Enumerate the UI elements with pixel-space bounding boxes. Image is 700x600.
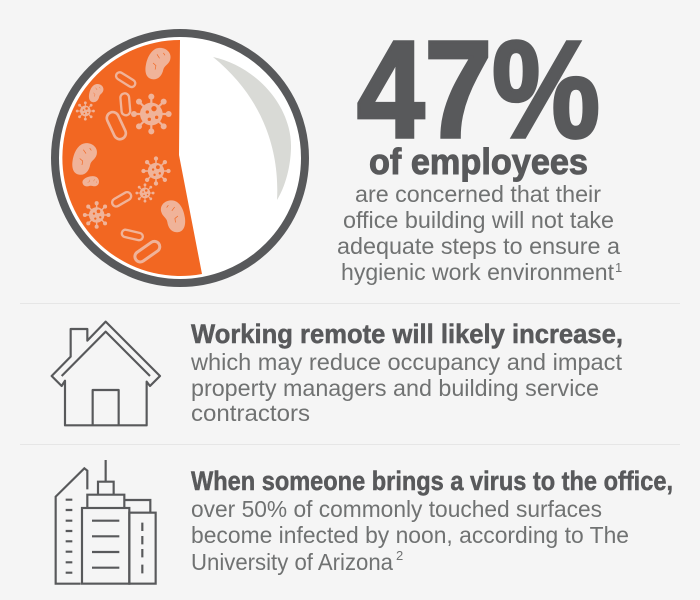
description text: hygienic work environment — [341, 259, 615, 285]
text block: working remote: which may reduce occupancy and impact — [190, 349, 623, 375]
description text — [337, 181, 622, 285]
big statistic: 47%: 47% — [357, 13, 600, 167]
description text: adequate steps to ensure a — [337, 233, 620, 259]
subheading: of employees: of employees — [369, 141, 588, 182]
text block: working remote: Working remote will likely increase, — [191, 319, 623, 349]
text block: virus in the office: University of Arizona — [191, 549, 393, 575]
text block: virus in the office: 2 — [396, 548, 403, 563]
grey crescent highlight — [213, 57, 291, 200]
text block: virus in the office — [191, 466, 673, 575]
icon: office buildings — [56, 460, 156, 584]
text block: working remote: property managers and building service — [191, 375, 599, 401]
text block: working remote: contractors — [191, 400, 310, 426]
text block: working remote — [190, 319, 623, 426]
description text: office building will not take — [343, 207, 614, 233]
text block: virus in the office: over 50% of commonly touched surfaces — [191, 496, 602, 522]
germs illustration — [70, 45, 187, 264]
description text: 1 — [615, 260, 622, 275]
orange 47% slice — [62, 40, 202, 276]
pie chart: 47% contaminated circle — [55, 33, 305, 283]
text block: virus in the office: become infected by noon, according to The — [191, 522, 629, 548]
description text: are concerned that their — [355, 181, 601, 207]
icon: house — [52, 322, 160, 425]
